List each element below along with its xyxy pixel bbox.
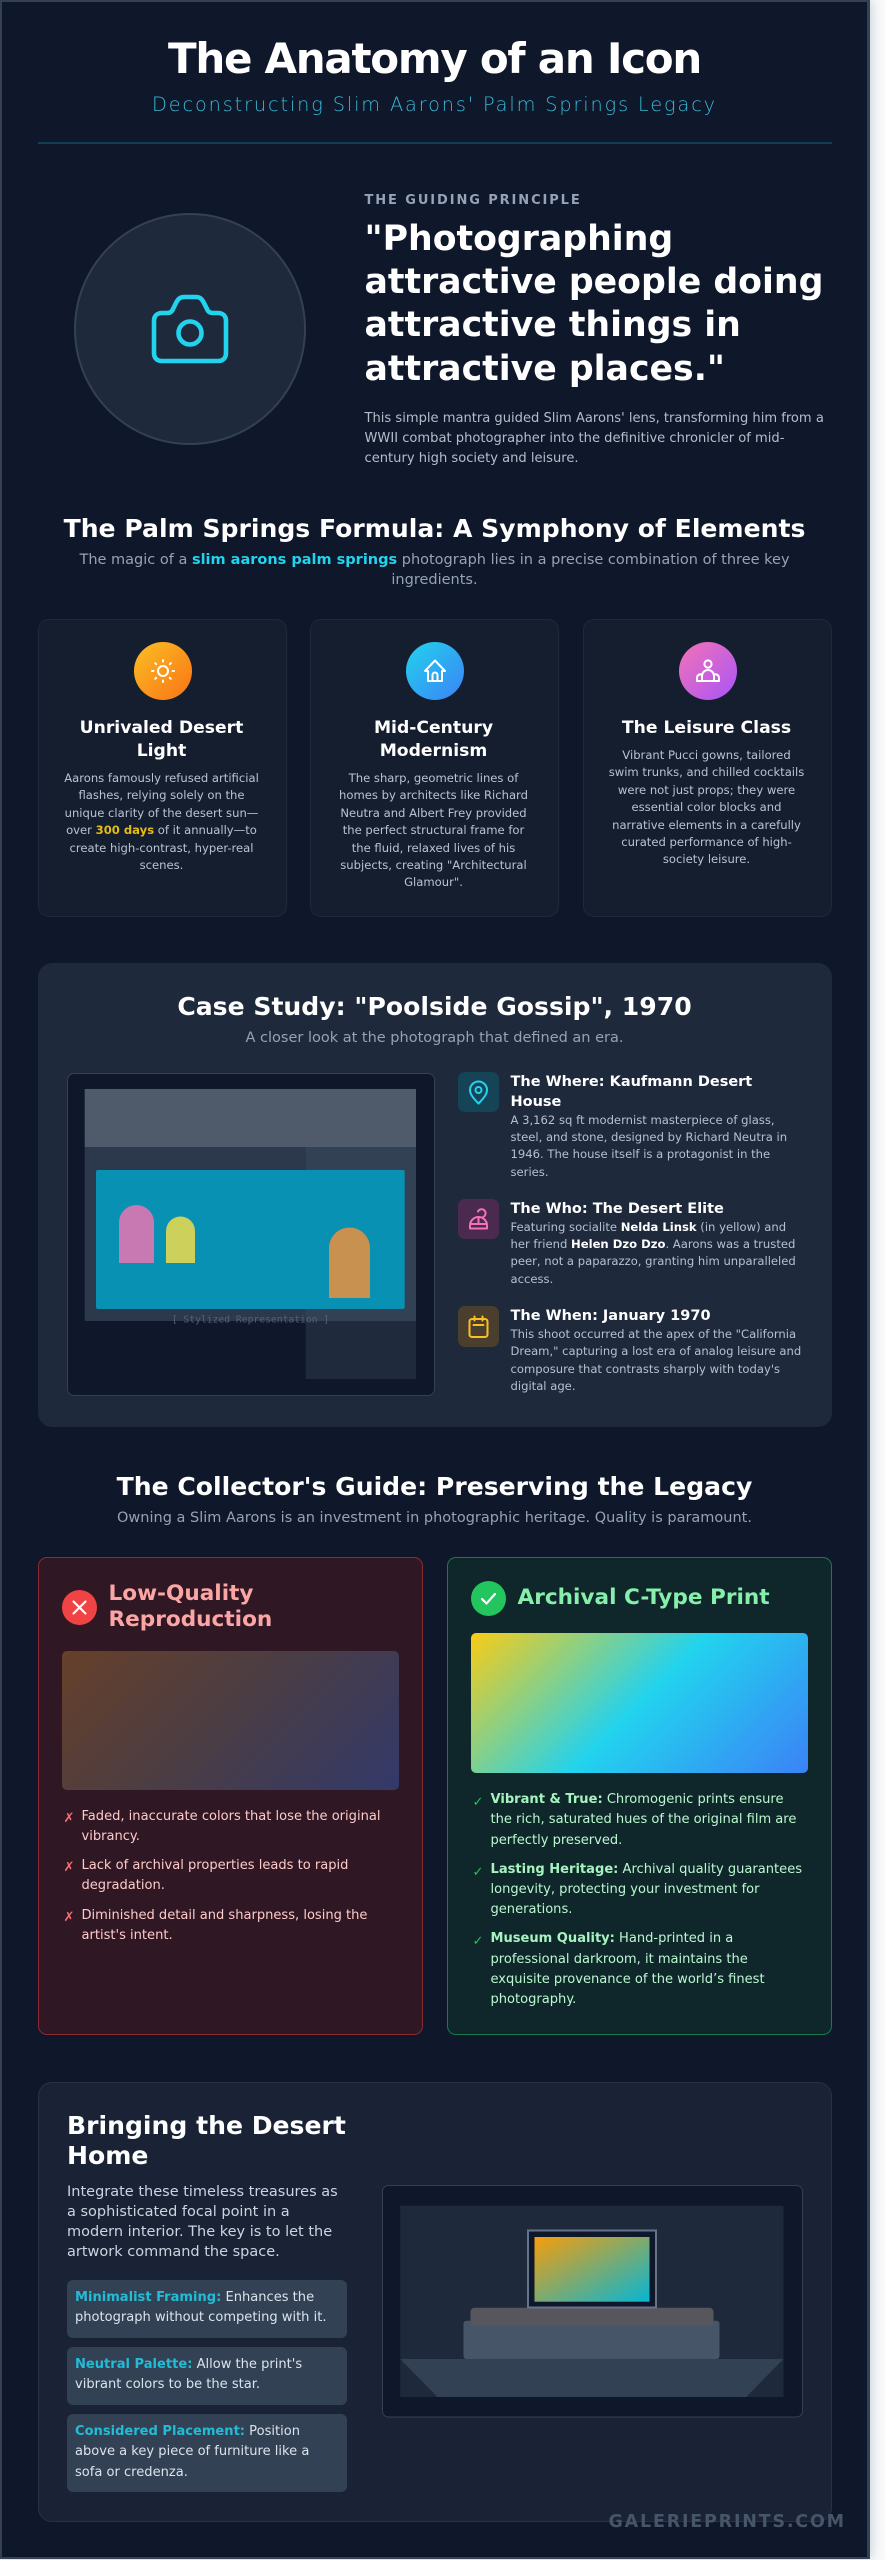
where text: A 3,162 sq ft modernist masterpiece of glass, xyxy=(510,1112,775,1126)
low-quality list: artist's intent. xyxy=(82,1928,173,1943)
when text: This shoot occurred at the apex of the "California xyxy=(510,1327,796,1341)
formula title: The Palm Springs Formula: A Symphony of Elements xyxy=(64,514,805,542)
panel title: Archival C-Type Print xyxy=(518,1584,770,1610)
panel title: Home xyxy=(67,2140,148,2170)
icon: calendar xyxy=(458,1306,498,1346)
icon: sun xyxy=(134,642,192,700)
card text: Vibrant Pucci gowns, tailored xyxy=(622,748,791,762)
card text: the perfect structural frame for xyxy=(343,823,524,837)
panel intro: modern interior. The key is to let the xyxy=(67,2224,332,2240)
low-quality list: Faded, inaccurate colors that lose the original xyxy=(82,1808,380,1824)
tip: placement xyxy=(67,2414,346,2492)
archival list: generations. xyxy=(490,1902,572,1917)
archival list: ✓ xyxy=(472,1795,483,1810)
card text: flashes, relying solely on the xyxy=(78,788,245,802)
who text: Featuring socialite Nelda Linsk (in yellow) and xyxy=(510,1220,786,1234)
collector title: The Collector's Guide: Preserving the Legacy xyxy=(117,1472,752,1500)
where text: series. xyxy=(510,1165,549,1179)
card text: create high-contrast, hyper-real xyxy=(69,841,254,855)
formula intro: ingredients. xyxy=(391,572,478,588)
card title: Light xyxy=(137,741,186,761)
where title xyxy=(510,1074,752,1110)
low-quality list: ✗ xyxy=(64,1910,74,1924)
card text: curated performance of high- xyxy=(621,835,792,849)
icon: camera in circle xyxy=(74,213,306,445)
card title: Modernism xyxy=(380,741,487,761)
faded image xyxy=(62,1651,398,1790)
item 1 xyxy=(64,1808,380,1844)
low-quality list: Lack of archival properties leads to rapid xyxy=(82,1858,348,1873)
quote description: century high society and leisure. xyxy=(364,451,579,466)
who title: The Who: The Desert Elite xyxy=(510,1200,724,1216)
archival list: photography. xyxy=(490,1992,576,2007)
panel intro: Integrate these timeless treasures as xyxy=(67,2184,338,2200)
when text: digital age. xyxy=(510,1379,576,1393)
figure pink xyxy=(119,1205,154,1263)
item 2 xyxy=(472,1862,802,1917)
archival list: Lasting Heritage: Archival quality guarantees xyxy=(490,1862,802,1877)
eyebrow label: THE GUIDING PRINCIPLE xyxy=(364,192,582,208)
roof band xyxy=(85,1089,416,1147)
archival list: longevity, protecting your investment for xyxy=(490,1882,760,1897)
panel: low-quality reproduction xyxy=(38,1557,422,2035)
archival list: ✓ xyxy=(472,1865,483,1880)
panel intro: a sophisticated focal point in a xyxy=(67,2204,290,2220)
who text: access. xyxy=(510,1272,553,1286)
archival list: exquisite provenance of the world’s finest xyxy=(490,1972,765,1987)
card text: unique clarity of the desert sun— xyxy=(65,806,258,820)
when text xyxy=(510,1327,801,1393)
where title: House xyxy=(510,1094,561,1110)
card text: essential color blocks and xyxy=(631,800,782,814)
card text: over 300 days of it annually—to xyxy=(66,823,257,837)
quote: attractive people doing xyxy=(364,262,823,302)
case study title: Case Study: "Poolside Gossip", 1970 xyxy=(177,992,692,1020)
archival list: the rich, saturated hues of the original film are xyxy=(490,1812,796,1827)
panel: case study xyxy=(38,962,832,1426)
stylized photograph xyxy=(66,1072,434,1396)
where title: The Where: Kaufmann Desert xyxy=(510,1074,752,1090)
item: who xyxy=(458,1199,796,1286)
icon: person xyxy=(458,1198,498,1239)
low-quality list xyxy=(64,1808,380,1943)
tip: framing xyxy=(67,2280,346,2338)
card title: Unrivaled Desert xyxy=(80,718,243,738)
archival list: ✓ xyxy=(472,1934,483,1949)
who text: her friend Helen Dzo Dzo. Aarons was a trusted xyxy=(510,1237,795,1251)
tip: palette: Neutral Palette: Allow the print's xyxy=(75,2356,302,2372)
tip: framing: photograph without competing with it. xyxy=(75,2310,326,2325)
archival list: Vibrant & True: Chromogenic prints ensure xyxy=(490,1792,784,1807)
panel title xyxy=(67,2110,346,2170)
panel: formula cards xyxy=(38,619,832,917)
vibrant image xyxy=(470,1633,808,1772)
tip: palette xyxy=(67,2346,346,2404)
quote: attractive things in xyxy=(364,305,741,345)
panel title: Reproduction xyxy=(108,1607,272,1632)
pool xyxy=(96,1170,405,1309)
panel title: Bringing the Desert xyxy=(67,2110,346,2140)
panel intro xyxy=(67,2184,338,2260)
card title xyxy=(374,718,493,761)
icon: house xyxy=(406,642,464,700)
item 2 xyxy=(64,1858,348,1893)
icon: people xyxy=(678,642,736,700)
when text: composure that contrasts sharply with today's xyxy=(510,1362,780,1376)
tip: placement: above a key piece of furniture like a xyxy=(75,2444,309,2459)
low-quality list: ✗ xyxy=(64,1860,74,1875)
panel: archival c-type print xyxy=(446,1557,832,2035)
header xyxy=(38,34,832,144)
where text: steel, and stone, designed by Richard Neutra in xyxy=(510,1130,787,1144)
card text: Glamour". xyxy=(404,875,463,889)
card text: Aarons famously refused artificial xyxy=(64,771,259,785)
low-quality list: ✗ xyxy=(64,1810,74,1826)
item: where xyxy=(458,1072,787,1179)
where text: 1946. The house itself is a protagonist in the xyxy=(510,1147,770,1161)
card text: homes by architects like Richard xyxy=(339,788,528,802)
title: The Anatomy of an Icon xyxy=(168,34,701,82)
low-quality list: Diminished detail and sharpness, losing the xyxy=(82,1908,367,1922)
card text: were not just props; they were xyxy=(618,783,795,797)
item 1 xyxy=(472,1792,796,1848)
quote: "Photographing xyxy=(364,218,673,258)
where text xyxy=(510,1112,787,1179)
figure yellow xyxy=(166,1216,195,1263)
tip: placement: sofa or credenza. xyxy=(75,2464,188,2480)
panel title: Low-Quality xyxy=(108,1580,254,1606)
card title xyxy=(80,718,243,761)
figure orange xyxy=(329,1228,370,1298)
card title: Mid-Century xyxy=(374,718,493,738)
archival list: professional darkroom, it maintains the xyxy=(490,1952,748,1967)
case study subtitle: A closer look at the photograph that defined an era. xyxy=(246,1030,623,1046)
formula intro: The magic of a slim aarons palm springs photograph lies in a precise combination of three key xyxy=(79,552,790,568)
when text: Dream," capturing a lost era of analog leisure and xyxy=(510,1344,801,1358)
card text xyxy=(609,748,804,866)
card: modernism xyxy=(310,618,558,916)
subtitle: Deconstructing Slim Aarons' Palm Springs Legacy xyxy=(152,92,717,116)
quote: attractive places." xyxy=(364,349,725,389)
icon: cross xyxy=(62,1590,97,1625)
card text xyxy=(64,771,259,872)
card text: the fluid, relaxed lives of his xyxy=(352,841,515,855)
quote description: This simple mantra guided Slim Aarons' lens, transforming him from a xyxy=(364,410,824,426)
card text: society leisure. xyxy=(663,852,750,866)
panel: guiding principle xyxy=(74,192,824,466)
icon: map pin xyxy=(458,1072,498,1112)
low-quality list: degradation. xyxy=(82,1878,165,1893)
archival list xyxy=(472,1792,802,2007)
card text: scenes. xyxy=(140,858,183,872)
header rule xyxy=(38,142,832,144)
caption: [ Stylized Representation ] xyxy=(172,1314,329,1326)
panel title xyxy=(108,1580,272,1632)
card text: The sharp, geometric lines of xyxy=(349,771,518,785)
quote description: WWII combat photographer into the definitive chronicler of mid- xyxy=(364,431,784,446)
icon: check xyxy=(471,1581,506,1616)
section heading: collector's guide xyxy=(116,1472,752,1526)
archival list: Museum Quality: Hand-printed in a xyxy=(490,1931,733,1946)
card text: Neutra and Albert Frey provided xyxy=(340,806,527,820)
tip: placement: Considered Placement: Position xyxy=(75,2424,300,2438)
when title: The When: January 1970 xyxy=(510,1308,711,1324)
low-quality list: vibrancy. xyxy=(82,1829,140,1844)
card: leisure class xyxy=(582,618,832,916)
item: when xyxy=(458,1306,801,1393)
item 3 xyxy=(64,1908,367,1943)
card text: narrative elements in a carefully xyxy=(612,818,801,832)
who text: peer, not a paparazzo, granting him unparalleled xyxy=(510,1254,796,1268)
card: desert light xyxy=(38,618,286,916)
quote description xyxy=(364,410,824,466)
section heading: formula xyxy=(64,514,805,588)
tip: framing: Minimalist Framing: Enhances the xyxy=(75,2290,314,2304)
tip: palette: vibrant colors to be the star. xyxy=(75,2377,260,2392)
panel: bringing the desert home xyxy=(38,2082,832,2522)
panel intro: artwork command the space. xyxy=(67,2244,280,2260)
wall xyxy=(85,1147,416,1321)
card text: swim trunks, and chilled cocktails xyxy=(609,765,804,779)
card text xyxy=(339,771,528,889)
watermark: GALERIEPRINTS.COM xyxy=(608,2512,846,2532)
card text: subjects, creating "Architectural xyxy=(340,858,527,872)
item 3 xyxy=(472,1931,765,2007)
card title: The Leisure Class xyxy=(622,718,791,738)
quote xyxy=(364,218,823,389)
formula intro xyxy=(79,552,790,588)
who text xyxy=(510,1220,796,1286)
collector subtitle: Owning a Slim Aarons is an investment in photographic heritage. Quality is paramount. xyxy=(117,1510,752,1526)
archival list: perfectly preserved. xyxy=(490,1833,622,1848)
interior illustration xyxy=(382,2185,803,2418)
